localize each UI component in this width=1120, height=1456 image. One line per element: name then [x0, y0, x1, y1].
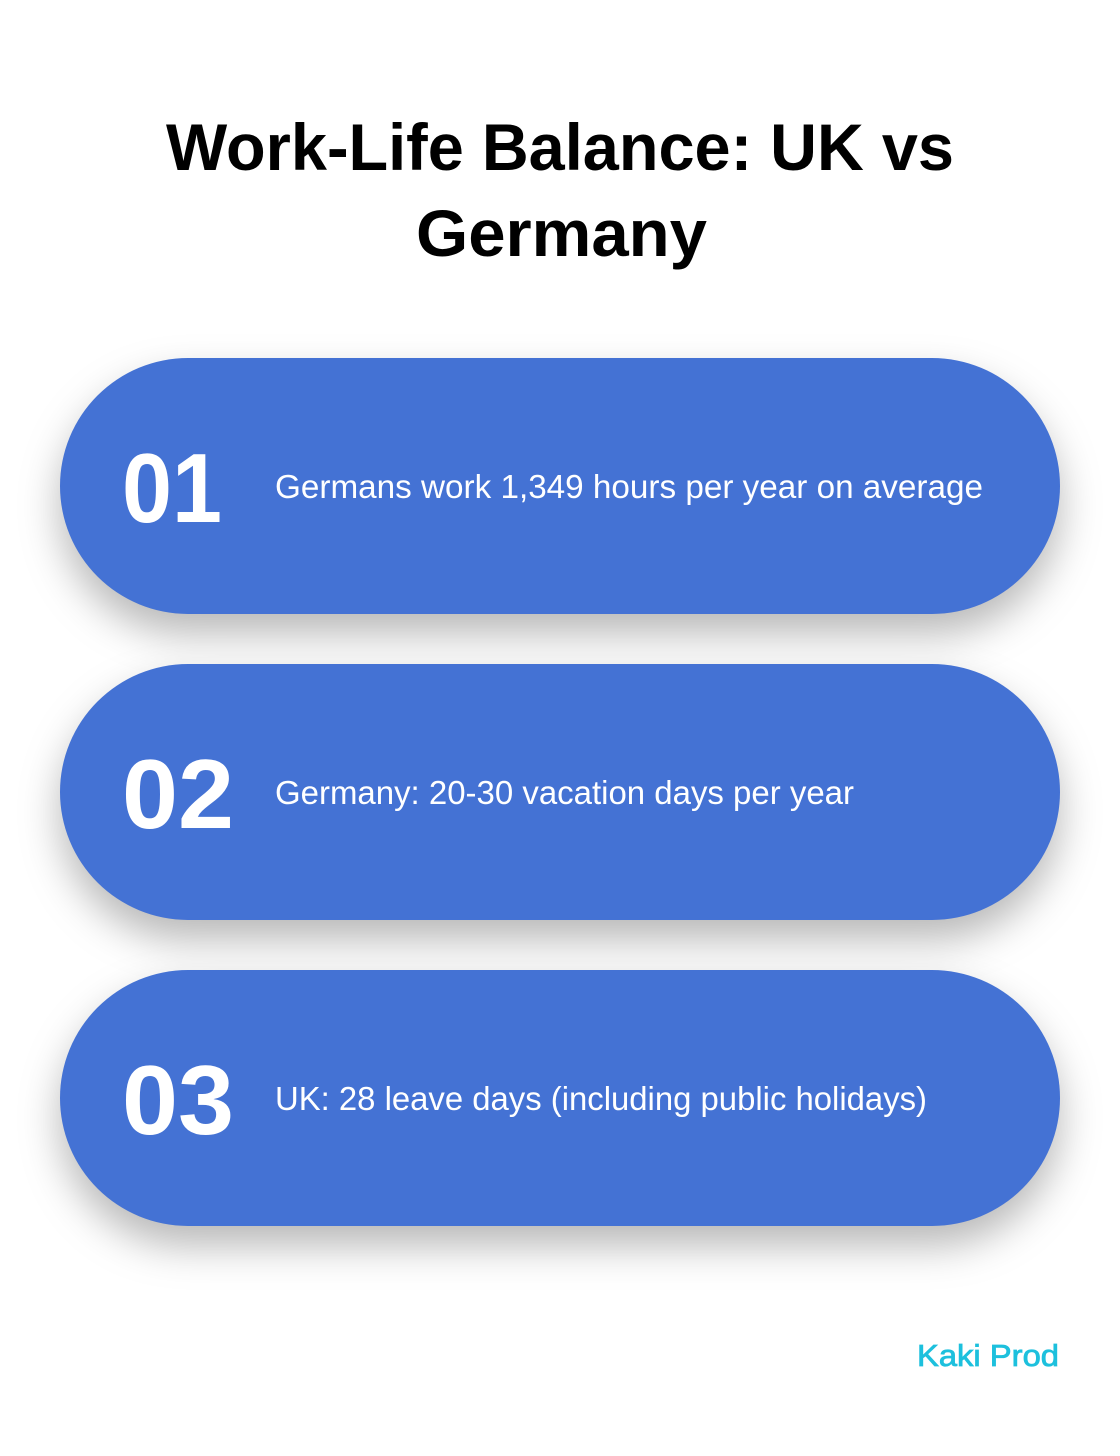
pill background 02	[60, 664, 1060, 920]
title: Work-Life Balance: UK vs	[166, 110, 954, 184]
panel: step 01	[60, 358, 1060, 614]
title	[166, 110, 954, 270]
logo: Kaki Prod: Kaki Prod	[917, 1338, 1059, 1373]
number 03: 03	[122, 1045, 234, 1155]
number 02: 02	[122, 739, 234, 849]
text 02: Germany: 20-30 vacation days per year	[275, 774, 854, 811]
number 01: 01	[122, 433, 222, 543]
title: Germany	[416, 196, 707, 270]
panel: step 02	[60, 664, 1060, 920]
pill background 01	[60, 358, 1060, 614]
text 03: UK: 28 leave days (including public holidays)	[275, 1080, 927, 1117]
panel: step 03	[60, 970, 1060, 1226]
text 01: Germans work 1,349 hours per year on average	[275, 468, 983, 505]
pill background 03	[60, 970, 1060, 1226]
